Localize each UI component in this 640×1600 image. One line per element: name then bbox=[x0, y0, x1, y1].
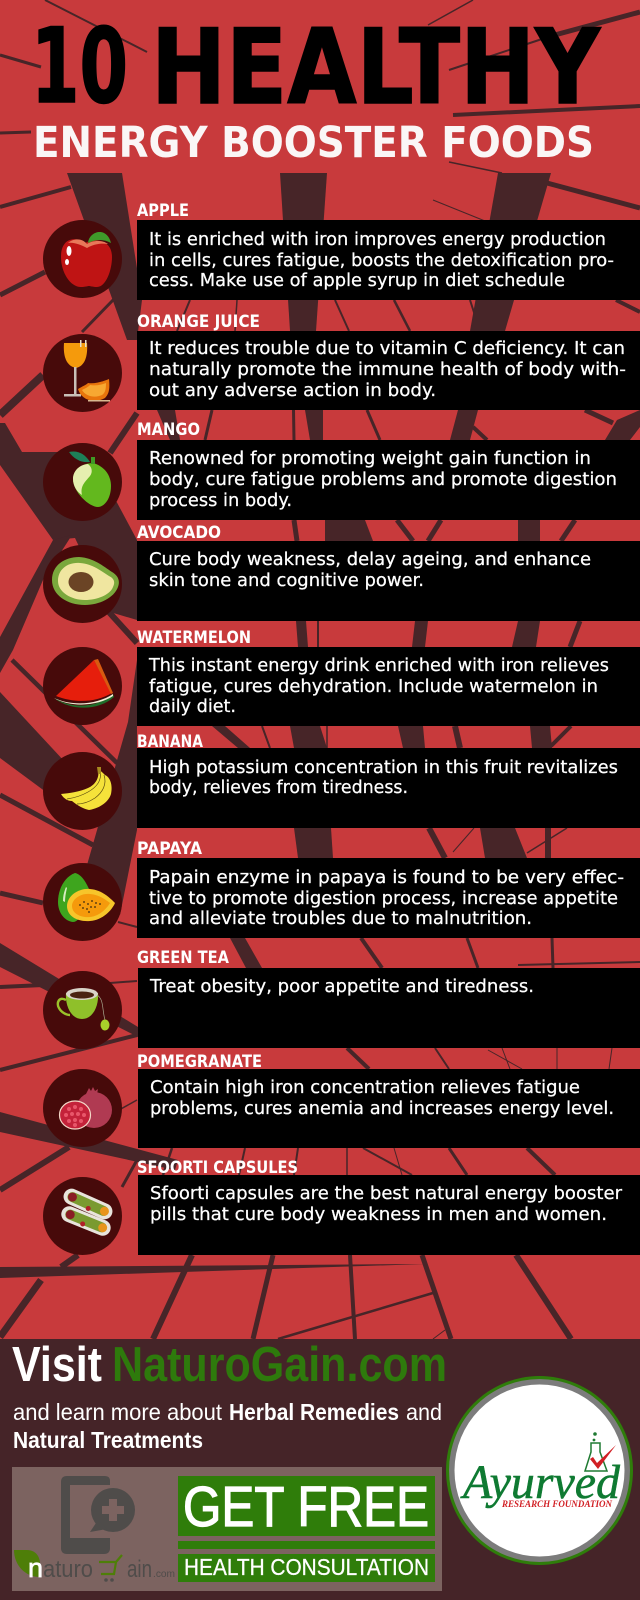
text: mango bbox=[149, 448, 617, 511]
icon: watermelon bbox=[43, 647, 122, 725]
panel: orange juice bbox=[137, 312, 640, 410]
text: pomegranate: Contain high iron concentration relieves fatigue bbox=[150, 1077, 580, 1098]
banner: health consultation: HEALTH CONSULTATION bbox=[184, 1554, 429, 1580]
logo: naturogain: .com bbox=[153, 1569, 175, 1580]
text: watermelon: fatigue, cures dehydration. Include watermelon in bbox=[149, 676, 598, 697]
label: pomegranate: POMEGRANATE bbox=[137, 1052, 262, 1071]
icon: phone with medical cross bbox=[61, 1476, 135, 1554]
panel: pomegranate bbox=[137, 1052, 640, 1148]
text: orange juice bbox=[149, 338, 626, 401]
subtitle: ENERGY BOOSTER FOODS bbox=[33, 119, 594, 168]
label: green tea: GREEN TEA bbox=[137, 948, 229, 967]
icon: sfoorti capsules bbox=[43, 1177, 122, 1255]
heading: visit naturogain: Visit bbox=[12, 1338, 102, 1392]
icon: flask with check bbox=[585, 1432, 616, 1471]
logo: ayurved research foundation bbox=[446, 1376, 633, 1565]
text: sfoorti capsules: pills that cure body weakness in men and women. bbox=[150, 1204, 607, 1225]
text: green tea: Treat obesity, poor appetite and tiredness. bbox=[149, 976, 534, 997]
title: 10 bbox=[31, 7, 128, 127]
text: learn more: Natural Treatments bbox=[13, 1427, 203, 1453]
icon: avocado bbox=[43, 545, 122, 623]
logo: naturogain: n bbox=[28, 1553, 43, 1583]
text: orange juice: It reduces trouble due to vitamin C deficiency. It can bbox=[149, 338, 625, 359]
panel: sfoorti capsules bbox=[137, 1158, 640, 1255]
logo: naturogain: aturo bbox=[43, 1556, 93, 1583]
text: banana bbox=[149, 757, 618, 798]
footer panel bbox=[0, 1338, 640, 1600]
icon: papaya bbox=[43, 863, 122, 941]
text: papaya: and alleviate troubles due to malnutrition. bbox=[149, 908, 532, 929]
label: orange juice: ORANGE JUICE bbox=[137, 312, 260, 331]
label: mango: MANGO bbox=[137, 420, 200, 439]
panel: banana bbox=[137, 732, 640, 828]
panel: mango bbox=[137, 420, 640, 520]
text: avocado: Cure body weakness, delay ageing, and enhance bbox=[149, 549, 591, 570]
text: apple bbox=[149, 229, 614, 291]
text: learn more: and learn more about bbox=[13, 1399, 223, 1425]
logo: ayurved research foundation: RESEARCH FOUNDATION bbox=[501, 1499, 612, 1509]
label: watermelon: WATERMELON bbox=[137, 628, 251, 647]
text: apple: cess. Make use of apple syrup in diet schedule bbox=[149, 270, 565, 291]
text: learn more: and bbox=[406, 1399, 442, 1425]
text: pomegranate bbox=[150, 1077, 614, 1119]
icon: apple bbox=[43, 220, 122, 298]
text: learn more bbox=[13, 1399, 442, 1453]
icon: pomegranate bbox=[43, 1069, 122, 1147]
text: apple: in cells, cures fatigue, boosts the detoxification pro- bbox=[149, 250, 614, 271]
panel: apple bbox=[137, 201, 640, 300]
text: mango: Renowned for promoting weight gain function in bbox=[149, 448, 591, 469]
logo: naturogain: ain bbox=[127, 1556, 152, 1583]
panel: free consultation bbox=[12, 1467, 442, 1591]
label: apple: APPLE bbox=[137, 201, 189, 220]
icon: mango bbox=[43, 443, 122, 521]
text: papaya: tive to promote digestion process, increase appetite bbox=[149, 888, 618, 909]
panel: green tea bbox=[137, 948, 640, 1048]
text: banana: High potassium concentration in this fruit revitalizes bbox=[149, 757, 618, 778]
heading: visit naturogain bbox=[12, 1338, 447, 1392]
heading: visit naturogain: NaturoGain.com bbox=[112, 1338, 447, 1392]
text: watermelon: This instant energy drink enriched with iron relieves bbox=[148, 655, 609, 676]
text: learn more: Herbal Remedies bbox=[229, 1399, 399, 1425]
panel: papaya bbox=[137, 839, 640, 938]
text: avocado: skin tone and cognitive power. bbox=[149, 570, 424, 591]
text: orange juice: out any adverse action in body. bbox=[149, 380, 436, 401]
text: banana: body, relieves from tiredness. bbox=[149, 777, 408, 798]
left bands bbox=[0, 423, 137, 620]
text: papaya: Papain enzyme in papaya is found to be very effec- bbox=[149, 867, 624, 888]
text: watermelon bbox=[148, 655, 609, 717]
text: mango: process in body. bbox=[149, 490, 292, 511]
text: orange juice: naturally promote the immune health of body with- bbox=[149, 359, 626, 380]
icon: orange juice bbox=[43, 334, 122, 412]
label: avocado: AVOCADO bbox=[137, 523, 221, 542]
logo: naturogain bbox=[14, 1550, 175, 1583]
icon: banana bbox=[43, 752, 122, 830]
panel: avocado bbox=[137, 523, 640, 621]
text: avocado bbox=[149, 549, 591, 591]
label: banana: BANANA bbox=[137, 732, 203, 751]
text: watermelon: daily diet. bbox=[149, 696, 236, 717]
text: papaya bbox=[149, 867, 624, 929]
text: sfoorti capsules bbox=[150, 1183, 623, 1225]
panel: watermelon bbox=[137, 628, 640, 726]
logo: ayurved research foundation: Ayurved bbox=[460, 1456, 621, 1509]
icon: green tea bbox=[43, 971, 122, 1049]
label: sfoorti capsules: SFOORTI CAPSULES bbox=[137, 1158, 298, 1177]
text: apple: It is enriched with iron improves energy production bbox=[149, 229, 606, 250]
label: papaya: PAPAYA bbox=[137, 839, 202, 858]
banner: get free: GET FREE bbox=[183, 1475, 429, 1539]
text: sfoorti capsules: Sfoorti capsules are the best natural energy booster bbox=[150, 1183, 623, 1204]
text: pomegranate: problems, cures anemia and increases energy level. bbox=[150, 1098, 614, 1119]
text: mango: body, cure fatigue problems and promote digestion bbox=[149, 469, 617, 490]
